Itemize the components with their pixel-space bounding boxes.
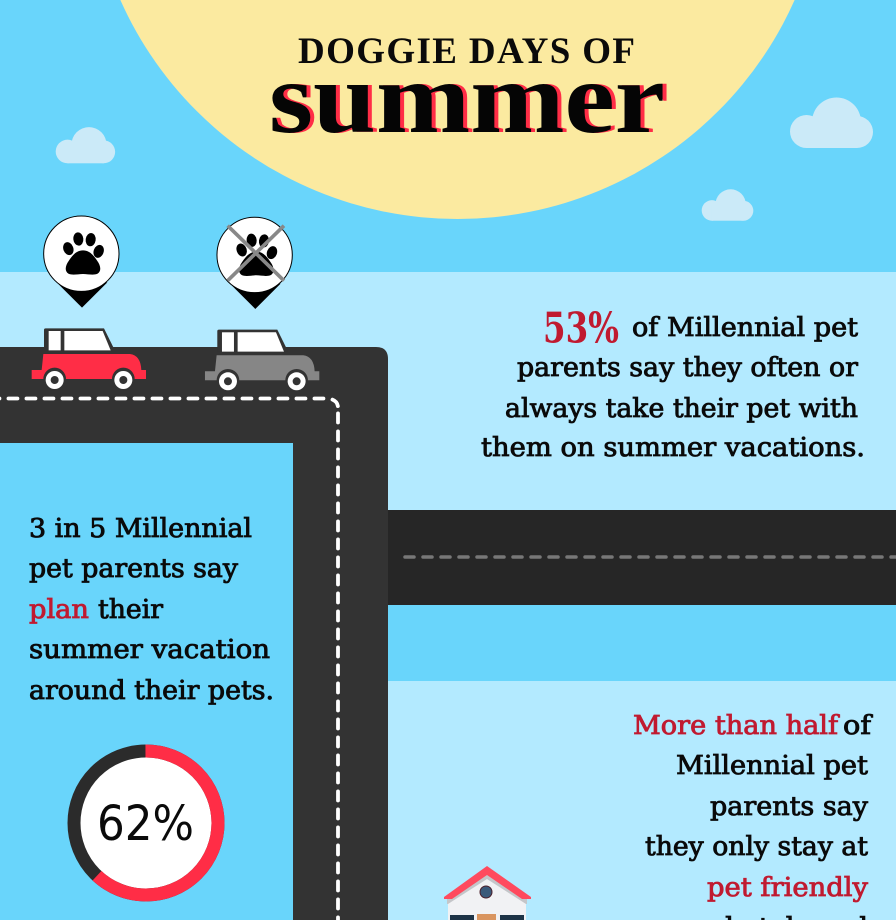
text block: more than half stay pet friendly	[633, 711, 874, 920]
title	[269, 31, 669, 155]
cloud: upper right	[790, 98, 873, 148]
sun	[88, 0, 826, 219]
text block: 53% take pets on vacation	[481, 304, 865, 463]
light band: upper	[0, 272, 896, 512]
sky panel: left of road	[0, 443, 294, 920]
location pin: no pets	[217, 217, 292, 309]
icon: house	[444, 866, 531, 920]
text block: 3 in 5 plan vacation: pet parents say	[29, 554, 238, 584]
car: grey	[205, 330, 319, 392]
text block: more than half stay pet friendly: pet friendly	[707, 873, 868, 903]
donut chart: 62%	[74, 751, 218, 895]
text block: 53% take pets on vacation: of Millennial pet	[632, 313, 859, 343]
horizontal road: right branch	[388, 510, 896, 605]
cloud: lower right	[702, 189, 753, 221]
text block: more than half stay pet friendly: of	[843, 711, 874, 741]
text block: 3 in 5 plan vacation: summer vacation	[29, 635, 270, 665]
car: red	[32, 328, 146, 391]
title: summer shadow: summer	[273, 42, 669, 155]
text block: more than half stay pet friendly: they only stay at	[645, 832, 869, 862]
location pin: pets welcome	[44, 216, 119, 308]
text block: more than half stay pet friendly: More than half	[633, 711, 840, 741]
text block: 53% take pets on vacation: always take their pet with	[505, 394, 858, 424]
cloud: left	[56, 127, 115, 163]
text block: 3 in 5 plan vacation	[29, 514, 274, 706]
title: first line: DOGGIE DAYS OF	[298, 31, 635, 72]
main road	[0, 347, 388, 920]
text block: 3 in 5 plan vacation: 3 in 5 Millennial	[29, 514, 252, 544]
title: summer: summer	[269, 42, 665, 155]
donut label: 62%	[97, 796, 194, 852]
text block: 53% take pets on vacation: them on summer vacations.	[481, 433, 865, 463]
text block: 3 in 5 plan vacation: their	[98, 595, 164, 625]
text block: more than half stay pet friendly: Millennial pet	[676, 751, 869, 781]
text block: more than half stay pet friendly: parents say	[710, 792, 868, 822]
light band: lower right	[388, 681, 896, 920]
text block: 3 in 5 plan vacation: plan	[29, 595, 89, 625]
text block: 53% take pets on vacation: parents say they often or	[517, 353, 859, 383]
text block: 3 in 5 plan vacation: around their pets.	[29, 676, 274, 706]
stat: 53%: 53%	[543, 304, 619, 352]
